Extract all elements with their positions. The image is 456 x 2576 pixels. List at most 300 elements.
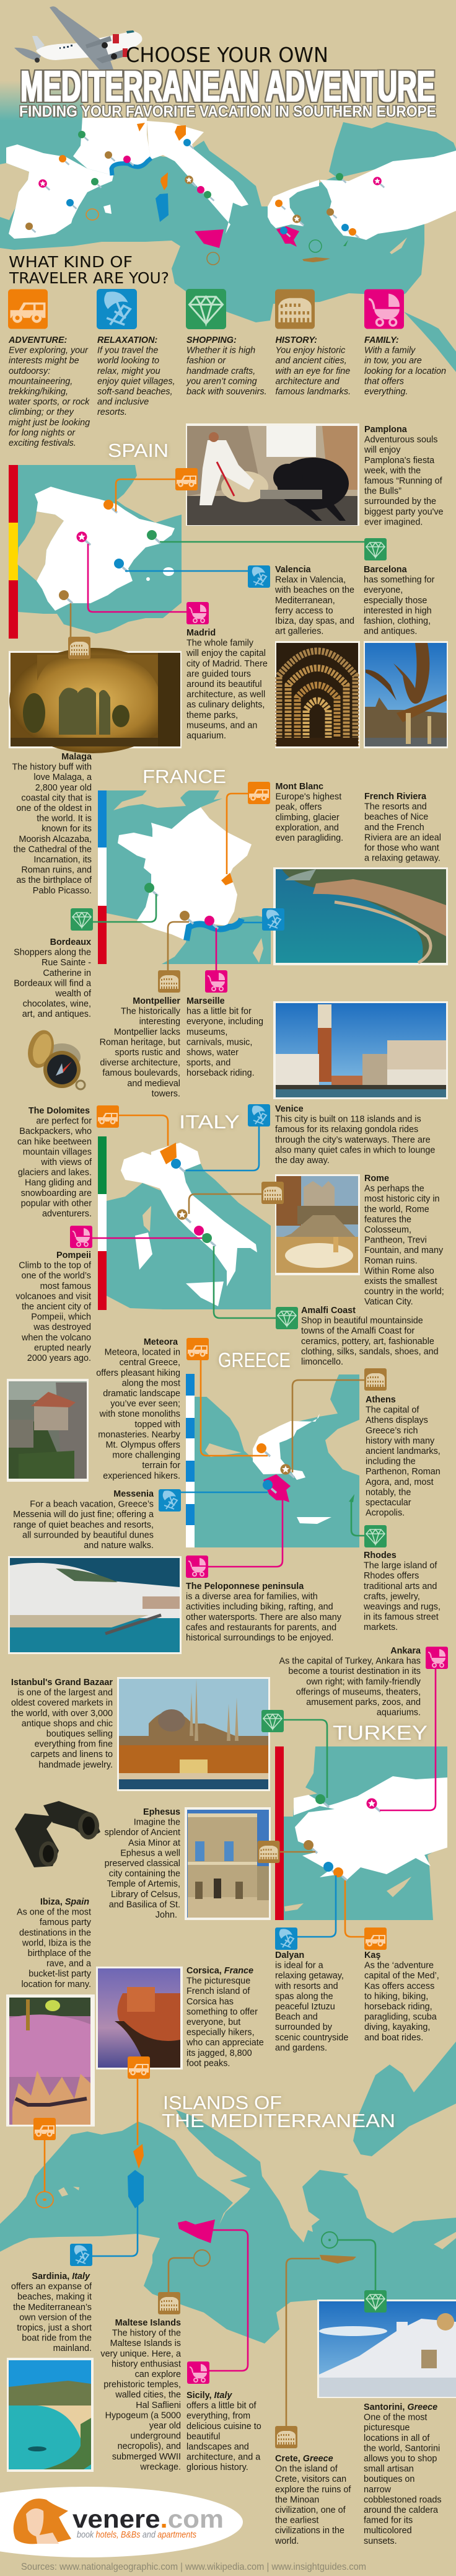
text: Santorini: cobblestoned roads — [364, 2495, 442, 2505]
text: Pamplona: week, with the — [364, 466, 421, 476]
text: Crete: civilization, one of — [275, 2505, 346, 2515]
text: Amalfi Coast: ceramics, pottery, art, fashionable — [301, 1337, 434, 1347]
panel: traveler types — [8, 289, 446, 448]
illustration: binoculars — [15, 1801, 100, 1867]
text: Malaga: Roman ruins, and — [21, 865, 92, 875]
text: family: With a family — [364, 346, 416, 356]
text: Pompeii: most famous — [40, 1281, 91, 1291]
text: Sardinia: own version of the — [19, 2313, 92, 2322]
icon: Sardinia relaxation — [70, 2244, 92, 2266]
text: Pompeii: Climb to the top of — [19, 1261, 92, 1271]
text: Messenia: and nature walks. — [84, 1541, 154, 1551]
text: The Peloponnese peninsula: historical surroundings to be enjoyed. — [186, 1633, 333, 1643]
heading: what kind of traveler: TRAVELER ARE YOU? — [9, 269, 169, 287]
text: French Riviera: Riviera are an ideal — [364, 833, 441, 843]
text: Ephesus: splendor of Ancient — [105, 1828, 180, 1838]
text: Santorini: picturesque — [364, 2423, 410, 2433]
text: Santorini: multicolored — [364, 2526, 412, 2536]
flag: Spain — [9, 465, 18, 639]
text: history: HISTORY: — [275, 335, 317, 345]
text: Bordeaux: Catherine in — [43, 968, 91, 978]
icon: Pamplona adventure — [175, 468, 198, 490]
text: Valencia: Mediterranean, — [275, 596, 335, 606]
text: relaxation: enjoy quiet villages, — [97, 376, 175, 386]
text: Amalfi Coast: clothing, silks, sandals, shoes, and — [301, 1347, 439, 1357]
text: The Dolomites: glaciers and lakes. — [18, 1168, 92, 1178]
text: The Peloponnese peninsula: other watersports. There are also many — [186, 1613, 342, 1622]
text: Kas: and boat rides. — [364, 2033, 423, 2043]
text: Marseille: everyone, including — [186, 1017, 263, 1027]
text: Ibiza: bucket-list party — [28, 1969, 92, 1979]
panel: Spain — [9, 423, 448, 896]
text: Messenia: Messenia — [113, 1489, 154, 1499]
text: Valencia: with beaches on the — [274, 585, 354, 595]
text: The Dolomites: Backpackers, who — [19, 1126, 92, 1136]
text: Santorini: One of the most — [364, 2413, 427, 2423]
text: Barcelona: fashion, clothing, — [364, 616, 431, 626]
text: Rome: Colosseum, — [364, 1225, 411, 1235]
icon: Malaga history — [68, 637, 90, 659]
text: Madrid: Madrid — [186, 628, 216, 638]
text: Crete: Crete, visitors can — [275, 2474, 346, 2484]
icon: Venice relaxation — [248, 1104, 270, 1126]
text: Athens: including the — [366, 1457, 416, 1467]
text: Malaga: the Cathedral of the — [14, 844, 92, 854]
text: Ibiza: As one of the most — [17, 1908, 91, 1918]
text: Athens: Agora, and, most — [366, 1477, 434, 1487]
text: Santorini: narrow — [364, 2485, 392, 2495]
text: Athens: spectacular — [366, 1498, 411, 1508]
heading: Islands of the Mediterranean — [162, 2092, 395, 2131]
text: Pamplona: ever imagined. — [364, 517, 423, 527]
text: Ibiza: world, Ibiza is the — [22, 1938, 91, 1948]
text: Barcelona: Barcelona — [364, 565, 408, 575]
text: adventure: Ever exploring, your — [9, 346, 89, 356]
text: Pamplona: surrounded by the — [364, 497, 436, 507]
text: Istanbul: the world, with over 3,000 — [11, 1709, 113, 1719]
icon: Mont Blanc adventure — [248, 782, 270, 804]
text: Montpellier: Montpellier lacks — [114, 1027, 180, 1037]
map: France — [107, 790, 271, 964]
text: Kas: to hiking, biking, — [364, 1991, 428, 2001]
text: Maltese Islands: necropolis), and — [118, 2441, 181, 2451]
text: Malaga: coastal city that is — [21, 793, 92, 803]
text: Venice: also many quiet cafes in which to lounge — [275, 1145, 435, 1155]
icon: Peloponnese family — [186, 1556, 208, 1578]
text: Mont Blanc: climbing, glacier — [275, 813, 340, 823]
text: Crete: world. — [274, 2536, 299, 2546]
text: Bordeaux: Shoppers along the — [14, 948, 91, 958]
text: Maltese Islands: prehistoric temples, — [103, 2380, 181, 2390]
icon: Venus — [14, 2499, 71, 2544]
text: Maltese Islands: walled cities, the — [115, 2390, 181, 2400]
text: Dalyan: with resorts and — [274, 1981, 338, 1991]
text: Rhodes: in its famous street — [364, 1613, 439, 1622]
text: The Dolomites: are perfect for — [36, 1117, 92, 1126]
connectors: Turkey — [280, 1668, 436, 1937]
text: family: FAMILY: — [364, 335, 399, 345]
text: Maltese Islands: submerged WWII — [112, 2452, 181, 2462]
text: Valencia: art galleries. — [275, 627, 323, 637]
photo: Istanbul — [117, 1677, 270, 1791]
icon: Rome history — [261, 1182, 284, 1204]
text: Rhodes: markets. — [364, 1622, 398, 1632]
text: Sardinia: beaches, making it — [17, 2292, 92, 2302]
text: family: looking for a location — [364, 366, 446, 376]
text: Maltese Islands: Maltese Islands is — [110, 2339, 181, 2348]
title — [19, 43, 436, 120]
photo: Valencia — [275, 641, 360, 748]
photo: Pamplona — [186, 423, 359, 526]
icon: Athens history — [364, 1368, 387, 1391]
text: adventure: trekking/hiking, — [9, 387, 68, 397]
text: history: architecture and — [275, 376, 340, 386]
text: Dalyan: and gardens. — [275, 2043, 327, 2053]
text: Mont Blanc: exploration, and — [275, 823, 339, 833]
text: The Dolomites: The Dolomites — [28, 1106, 90, 1116]
text: Corsica: especially hikers, — [186, 2028, 255, 2038]
text: Malaga: as the birthplace of — [16, 875, 92, 885]
text: Ephesus: Imagine the — [134, 1818, 180, 1828]
text: Venice: Venice — [275, 1104, 304, 1114]
text: Maltese Islands: can explore — [135, 2370, 181, 2379]
heading: Turkey: TURKEY — [333, 1722, 428, 1744]
text: Dalyan: surrounded by — [275, 2022, 333, 2032]
text: Athens: Acropolis. — [366, 1508, 405, 1518]
icon: Ephesus history — [258, 1841, 280, 1863]
text: Pamplona: will enjoy — [364, 445, 401, 455]
heading: Greece: GREECE — [218, 1348, 291, 1371]
flag: Turkey — [275, 1746, 284, 1920]
illustration: compass — [24, 1027, 85, 1089]
text: Santorini: small artisan — [364, 2464, 414, 2474]
text: Sardinia: offers an expanse of — [11, 2282, 92, 2292]
text: shopping: handmade crafts, — [186, 366, 255, 376]
text: Messenia: For a beach vacation, Greece’s — [30, 1500, 154, 1510]
text: relaxation: relax, might you — [97, 366, 160, 376]
text: Messenia: range of quiet beaches and resorts, — [14, 1520, 154, 1530]
text: Venice: through the city’s waterways. There are — [275, 1135, 431, 1145]
text: Meteora: experienced hikers. — [103, 1471, 180, 1481]
text: Meteora: more challenging — [112, 1451, 180, 1461]
text: Corsica: French island of — [186, 1986, 250, 1996]
text: Corsica: its jagged, 8,800 — [186, 2048, 252, 2058]
text: Rome: Vatican City. — [364, 1297, 413, 1307]
text: Maltese Islands: history enthusiast — [112, 2359, 181, 2369]
text: Pamplona: famous “Running of — [364, 476, 443, 486]
text: Dalyan: is ideal for a — [275, 1961, 323, 1971]
text: Maltese Islands: very unique. Here, a — [100, 2349, 181, 2359]
text: Bordeaux: chocolates, wine, — [23, 999, 91, 1009]
photo: Santorini — [317, 2299, 456, 2398]
text: Sicily: landscapes and — [186, 2442, 249, 2452]
text: French Riviera: and the French — [364, 823, 424, 833]
text: Corsica: foot peaks. — [186, 2058, 230, 2068]
text: Rome: exists the smallest — [364, 1277, 437, 1286]
text: Sicily: glorious history. — [186, 2463, 248, 2472]
text: shopping: fashion or — [186, 356, 226, 366]
text: Sicily: offers a little bit of — [186, 2401, 257, 2411]
text: The Dolomites: snowboarding are — [21, 1188, 92, 1198]
icon: Sicily family — [187, 2361, 209, 2384]
text: Pamplona: biggest party you've — [364, 507, 444, 517]
text: Bordeaux: wealth of — [55, 989, 92, 999]
photo: Rome — [275, 1174, 360, 1275]
text: Venice: This city is built on 118 islands and is — [275, 1115, 421, 1125]
icon: Meteora adventure — [186, 1338, 209, 1360]
text: Marseille: has a little bit for — [186, 1007, 252, 1017]
text: relaxation: resorts. — [97, 407, 127, 417]
text: Rhodes: crafts, jewelry, — [364, 1591, 420, 1601]
text: Istanbul: handmade jewelry. — [38, 1760, 113, 1770]
text: Maltese Islands: year old — [149, 2421, 181, 2431]
photo: Ibiza — [6, 1994, 95, 2127]
text: Pompeii: one of the world’s — [21, 1271, 91, 1281]
illustration: airplane — [14, 6, 142, 73]
text: Mont Blanc: Europe's highest — [275, 792, 341, 802]
text: Amalfi Coast: Amalfi Coast — [301, 1306, 356, 1316]
text: Barcelona: has something for — [364, 575, 435, 585]
text: Kas: Kas offers access — [364, 1981, 434, 1991]
photo: Barcelona — [364, 641, 448, 748]
text: adventure: mountaineering, — [9, 376, 72, 386]
text: Malaga: one of the oldest in — [16, 803, 92, 813]
text: Bordeaux: art, and antiques. — [22, 1009, 91, 1019]
text: Madrid: around its beautiful — [186, 679, 262, 689]
text: Crete: civilizations in the — [275, 2526, 344, 2536]
text: Bordeaux: Bordeaux will find a — [14, 978, 91, 988]
text: Corsica: Corsica has — [186, 1997, 234, 2007]
heading: Islands of the Mediterranean: THE MEDITERRANEAN — [162, 2110, 395, 2131]
text: Athens: Athens displays — [366, 1415, 428, 1425]
text: Istanbul: oldest covered markets in — [11, 1698, 113, 1708]
map: Greece — [195, 1374, 359, 1547]
text: The Peloponnese peninsula: cafes and restaurants for parents, and — [186, 1622, 336, 1632]
text: Sicily: beautiful — [186, 2432, 220, 2441]
text: The Dolomites: can hike beetween — [17, 1137, 92, 1147]
text: Ephesus: Asia Minor at — [128, 1838, 180, 1848]
text: Rome: Rome — [364, 1174, 389, 1184]
text: Valencia: ferry access to — [275, 606, 333, 616]
text: Athens: Athens — [366, 1395, 396, 1405]
text: Meteora: Mt. Olympus offers — [105, 1440, 180, 1450]
icon: Madrid family — [186, 602, 209, 624]
text: adventure: interests might be — [9, 356, 79, 366]
connectors: Italy — [92, 1115, 276, 1318]
text: Barcelona: especially those — [364, 596, 427, 606]
icon: Pompeii family — [70, 1226, 92, 1248]
text: history: and ancient cities, — [275, 356, 347, 366]
text: Santorini: Santorini, Greece — [364, 2402, 437, 2412]
text: Messenia: all surrounded by beautiful dunes — [22, 1530, 154, 1540]
text: Sicily: everything, from — [186, 2411, 250, 2421]
text: Santorini: sunsets. — [364, 2536, 397, 2546]
panel: Turkey — [11, 1646, 448, 2053]
photo: Sardinia — [7, 2358, 94, 2472]
text: Crete: Crete, Greece — [275, 2454, 333, 2464]
heading: what kind of traveler — [9, 253, 169, 287]
text: Rome: Fountain, and many — [364, 1246, 444, 1255]
text: Maltese Islands: Hypogeum (a 5000 — [105, 2410, 181, 2420]
text: Rome: As perhaps the — [364, 1184, 424, 1194]
text: Rhodes: Rhodes offers — [364, 1571, 419, 1581]
text: Sardinia: the Mediterranean’s — [13, 2303, 92, 2313]
text: Ephesus: Temple of Artemis, — [107, 1879, 180, 1889]
text: Valencia: Relax in Valencia, — [275, 575, 346, 585]
text: Athens: ancient landmarks, — [366, 1446, 441, 1456]
photo: Meteora — [7, 1379, 89, 1482]
text: Sardinia: boat ride from the — [22, 2334, 92, 2344]
text: Meteora: Meteora, located in — [105, 1348, 180, 1358]
text: Madrid: aquarium. — [186, 731, 226, 741]
text: shopping: back with souvenirs. — [186, 387, 267, 397]
map: Mediterranean overview — [0, 81, 456, 372]
text: Athens: Greece’s rich — [366, 1426, 418, 1436]
text: French Riviera: beaches of Nice — [364, 812, 428, 822]
icon: Corsica adventure — [128, 2056, 150, 2079]
text: family: that offers — [364, 376, 404, 386]
text: Madrid: will enjoy the capital — [186, 648, 266, 658]
text: Madrid: architecture, as well — [186, 690, 265, 700]
text: Ephesus: city containing the — [109, 1869, 180, 1879]
icon: history — [275, 289, 315, 329]
text: Montpellier: Roman heritage, but — [100, 1037, 180, 1047]
text: Crete: the earliest — [275, 2516, 318, 2526]
text: Rome: Within Rome also — [364, 1266, 434, 1276]
text: history: with an eye for fine — [275, 366, 350, 376]
text: Pompeii: volcanoes and visit — [15, 1291, 91, 1301]
text: Ephesus: preserved classical — [105, 1859, 180, 1869]
text: The Peloponnese peninsula: is a diverse area for families, with — [186, 1592, 318, 1602]
text: Pompeii: Pompeii, which — [31, 1312, 91, 1322]
text: Ankara: amusement parks, zoos, and — [306, 1697, 421, 1707]
text: Amalfi Coast: limoncello. — [301, 1357, 343, 1367]
text: Corsica: everyone, but — [186, 2017, 240, 2027]
text: Meteora: offers pleasant hiking — [96, 1368, 180, 1378]
text: Bordeaux: Bordeaux — [50, 937, 91, 947]
text: Meteora: monasteries. Nearby — [98, 1430, 181, 1440]
text: Montpellier: sports rustic and — [115, 1048, 180, 1058]
text: Ankara: become a tourist destination in its — [288, 1666, 421, 1676]
text: Ibiza: famous party — [40, 1918, 92, 1928]
text: Kas: diving, kayaking, — [364, 2022, 430, 2032]
text: Sardinia: Sardinia, Italy — [32, 2272, 90, 2282]
icon: Ankara family — [426, 1647, 448, 1669]
text: Ibiza: birthplace of the — [28, 1949, 91, 1959]
text: history: famous landmarks. — [275, 387, 351, 397]
text: adventure: for long nights or — [9, 428, 76, 438]
text: Ephesus: John. — [156, 1910, 177, 1920]
text: Ephesus: and Basilica of St. — [109, 1900, 180, 1910]
map: Spain — [17, 465, 182, 634]
text: Kas: Kaş — [364, 1950, 380, 1960]
text: Rome: features the — [364, 1215, 411, 1224]
text: Rome: most historic city in — [364, 1194, 440, 1204]
text: adventure: outdoorsy: — [9, 366, 50, 376]
icon: adventure — [8, 289, 48, 329]
icon: French Riviera relaxation — [262, 908, 284, 931]
text: Montpellier: diverse architecture, — [100, 1058, 180, 1068]
text: Valencia: Valencia — [275, 565, 312, 575]
text: Maltese Islands: underground — [130, 2432, 181, 2441]
icon: Crete history — [275, 2426, 297, 2448]
text: Pamplona: Adventurous souls — [364, 435, 437, 445]
text: Madrid: as culinary delights, — [186, 700, 265, 710]
text: Mont Blanc: Mont Blanc — [275, 782, 323, 792]
text: Dalyan: relaxing getaway, — [275, 1971, 344, 1981]
text: Istanbul: is one of the largest and — [17, 1688, 113, 1698]
text: Athens: The capital of — [366, 1405, 419, 1415]
text: Rome: Pantheon, Trevi — [364, 1236, 427, 1246]
text: Mont Blanc: peak, offers — [275, 802, 322, 812]
text: Dalyan: Dalyan — [275, 1950, 304, 1960]
panel: France — [14, 766, 448, 1099]
photo: French Riviera — [273, 867, 448, 965]
heading: Spain: SPAIN — [108, 440, 169, 461]
text: Malaga: Pablo Picasso. — [33, 886, 92, 896]
text: The Dolomites: adventurers. — [42, 1209, 92, 1219]
text: The Dolomites: with views of — [40, 1157, 92, 1167]
text: Sardinia: tropics, just a short — [17, 2323, 92, 2333]
text: Madrid: are guided tours — [186, 669, 251, 679]
text: adventure: exciting festivals. — [9, 438, 76, 448]
icon: relaxation — [97, 289, 137, 329]
text: Pompeii: 2000 years ago. — [27, 1353, 91, 1363]
text: Ibiza: Ibiza, Spain — [40, 1897, 89, 1907]
text: Ibiza: rave, and a — [46, 1959, 91, 1969]
text: Pamplona: Pamplona's fiesta — [364, 456, 434, 466]
text: Rhodes: Rhodes — [364, 1551, 397, 1560]
text: Marseille: horseback riding. — [186, 1068, 255, 1078]
connectors: Greece — [181, 1360, 364, 1567]
text: Barcelona: and antiques. — [364, 627, 417, 637]
icon: Malta history — [158, 2292, 180, 2314]
text: Ephesus: Ephesus a well — [120, 1848, 180, 1858]
text: Barcelona: everyone, — [364, 585, 403, 595]
text: Athens: history with many — [366, 1436, 435, 1446]
text: Sicily: Sicily, Italy — [186, 2391, 232, 2401]
text: Malaga: Malaga — [61, 752, 92, 762]
text: relaxation: soft-sand beaches, — [97, 387, 173, 397]
text: Mont Blanc: even paragliding. — [275, 833, 343, 843]
text: Ephesus: Ephesus — [143, 1807, 180, 1817]
logo: venere.com: book hotels, B&Bs and apartments — [77, 2530, 196, 2540]
icon: Istanbul shopping — [261, 1710, 284, 1732]
text: The Dolomites: mountain villages — [23, 1147, 92, 1157]
text: Rhodes: traditional arts and — [364, 1582, 437, 1591]
photo: Venice — [273, 1001, 448, 1099]
text: Marseille: Marseille — [186, 996, 225, 1006]
text: Montpellier: The historically — [121, 1007, 181, 1017]
text: Meteora: central Greece, — [120, 1358, 180, 1368]
icon: Valencia relaxation — [248, 565, 270, 588]
text: Montpellier: towers. — [152, 1089, 180, 1099]
text: Madrid: The whole family — [186, 639, 254, 648]
text: Ankara: offerings of museums, theaters, — [296, 1687, 421, 1697]
text: Montpellier: interesting — [139, 1017, 180, 1027]
text: French Riviera: a relaxing getaway. — [364, 854, 441, 864]
text: The Peloponnese peninsula: The Peloponnese peninsula — [186, 1582, 304, 1591]
text: Kas: As the ‘adventure — [364, 1961, 434, 1971]
text: relaxation: If you travel the — [97, 346, 158, 356]
text: Sicily: architecture, and a — [186, 2453, 260, 2463]
text: Pompeii: Pompeii — [56, 1250, 91, 1260]
text: Montpellier: and medieval — [127, 1079, 180, 1089]
text: Sicily: delicious cuisine to — [186, 2422, 261, 2432]
text: shopping: you aren’t coming — [186, 376, 257, 386]
text: Rome: the world, Rome — [364, 1205, 429, 1215]
text: Pompeii: the ancient city of — [22, 1302, 92, 1312]
